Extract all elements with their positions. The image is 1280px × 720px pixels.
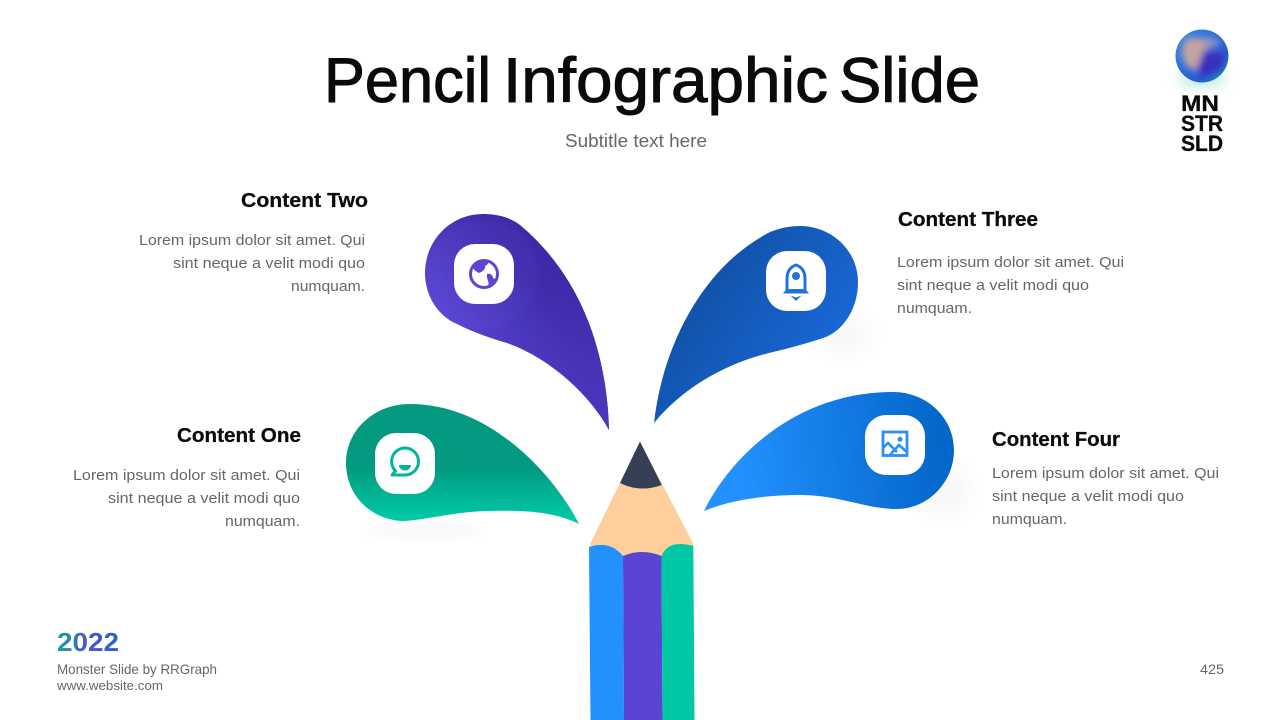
text block: content three: Content Three	[898, 209, 1038, 231]
logo wordmark: MN	[1181, 91, 1219, 116]
text block: content three: numquam.	[897, 300, 972, 317]
text block: content one: numquam.	[225, 513, 300, 530]
text block: content four: Content Four	[992, 429, 1120, 451]
logo sphere	[1176, 30, 1228, 82]
page number: 425	[1200, 661, 1224, 677]
icon: image	[865, 415, 925, 475]
subtitle: Subtitle text here	[565, 131, 707, 151]
text block: content two: sint neque a velit modi quo	[173, 255, 365, 272]
text block: content three	[897, 209, 1124, 317]
title: Slide	[839, 46, 980, 116]
text block: content three: Lorem ipsum dolor sit amet. Qui	[897, 254, 1124, 271]
pencil wood cone	[590, 442, 693, 570]
text block: content one	[73, 425, 301, 530]
pencil purple stripe	[623, 552, 662, 720]
brand logo	[1176, 30, 1228, 156]
pencil blue stripe	[589, 545, 624, 720]
title: Infographic	[503, 46, 828, 116]
text block: content four: sint neque a velit modi quo	[992, 488, 1184, 505]
text block: content one: Lorem ipsum dolor sit amet. Qui	[73, 467, 300, 484]
shadow	[819, 319, 871, 351]
icon: globe	[454, 244, 514, 304]
text block: content two: Lorem ipsum dolor sit amet. Qui	[139, 232, 365, 249]
text block: content one: sint neque a velit modi quo	[108, 490, 300, 507]
text block: content three: sint neque a velit modi quo	[897, 277, 1089, 294]
petal: content three (blue rocket bell)	[654, 226, 871, 423]
title	[324, 46, 980, 116]
petal: content two (purple globe)	[425, 214, 609, 430]
text block: content four: Lorem ipsum dolor sit amet. Qui	[992, 465, 1219, 482]
pencil	[589, 442, 694, 720]
text block: content one: Content One	[177, 425, 301, 447]
logo shadow	[1178, 69, 1226, 87]
text block: content two: Content Two	[241, 190, 368, 212]
icon: chat bubble	[375, 433, 435, 494]
footer: year and credits: Monster Slide by RRGraph	[57, 661, 217, 677]
text block: content two	[139, 190, 368, 295]
shadow	[923, 464, 967, 516]
text block: content four	[992, 429, 1219, 528]
pencil green stripe	[662, 544, 694, 720]
text block: content two: numquam.	[291, 278, 365, 295]
logo wordmark: SLD	[1181, 131, 1223, 156]
footer: year and credits: www.website.com	[56, 678, 163, 693]
shadow	[365, 523, 485, 537]
footer: year and credits: 2022	[57, 627, 119, 657]
footer: year and credits	[56, 627, 217, 693]
logo wordmark: STR	[1181, 111, 1223, 136]
petal: content one (green chat)	[346, 404, 579, 537]
petal: content four (blue image)	[704, 392, 967, 516]
pencil graphite tip	[620, 442, 662, 489]
logo wordmark	[1181, 91, 1223, 156]
text block: content four: numquam.	[992, 511, 1067, 528]
icon: bell	[766, 251, 826, 311]
title: Pencil	[324, 46, 491, 116]
